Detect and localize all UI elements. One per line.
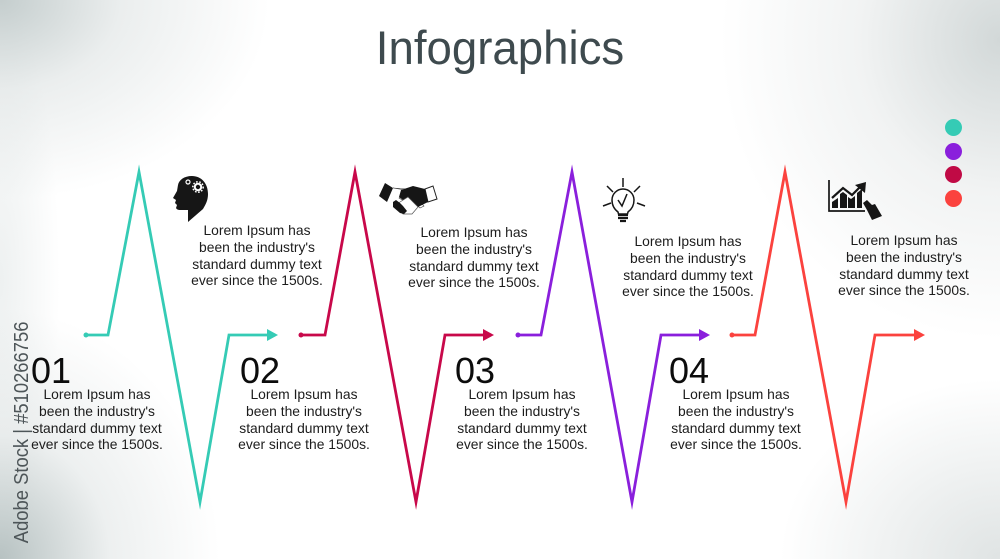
step 03: lower text [456, 386, 588, 452]
stock id label: Adobe Stock | #510266756 [11, 322, 33, 543]
step 03: lower text: been the industry's [464, 403, 580, 419]
upper text 4 [838, 232, 970, 298]
step 02: number: 02 [240, 350, 280, 391]
step 04: lower text: standard dummy text [671, 420, 801, 436]
step 03: lower text: ever since the 1500s. [456, 436, 588, 452]
upper text 4: standard dummy text [839, 266, 969, 282]
upper text 2 [408, 224, 540, 290]
upper text 4: Lorem Ipsum has [850, 232, 958, 248]
upper text 3: standard dummy text [623, 267, 753, 283]
step 02: lower text: been the industry's [246, 403, 362, 419]
legend dots [945, 119, 962, 207]
upper text 1: ever since the 1500s. [191, 272, 323, 288]
step 02: lower text: Lorem Ipsum has [250, 386, 358, 402]
upper text 1 [191, 222, 323, 288]
pulse line 4: coral [730, 172, 925, 502]
pulse line 2: crimson [298, 172, 494, 502]
upper text 3: been the industry's [630, 250, 746, 266]
upper text 1: been the industry's [199, 239, 315, 255]
step 01: lower text: standard dummy text [32, 420, 162, 436]
step 02: lower text: standard dummy text [239, 420, 369, 436]
upper text 4: ever since the 1500s. [838, 282, 970, 298]
step 02: lower text: ever since the 1500s. [238, 436, 370, 452]
upper text 1: standard dummy text [192, 256, 322, 272]
step 04: lower text: been the industry's [678, 403, 794, 419]
step 03: number: 03 [455, 350, 495, 391]
upper text 3 [622, 233, 754, 299]
step 03: lower text: Lorem Ipsum has [468, 386, 576, 402]
icon: handshake [379, 183, 437, 214]
upper text 3: ever since the 1500s. [622, 283, 754, 299]
upper text 3: Lorem Ipsum has [634, 233, 742, 249]
upper text 2: been the industry's [416, 241, 532, 257]
upper text 2: standard dummy text [409, 258, 539, 274]
upper text 4: been the industry's [846, 249, 962, 265]
step 04: lower text [670, 386, 802, 452]
icon: light bulb with check [603, 178, 645, 221]
step 04: lower text: ever since the 1500s. [670, 436, 802, 452]
upper text 2: Lorem Ipsum has [420, 224, 528, 240]
step 03: lower text: standard dummy text [457, 420, 587, 436]
step 01: number: 01 [31, 350, 71, 391]
step 02: lower text [238, 386, 370, 452]
title: Infographics [376, 21, 624, 74]
pulse line 1: teal [84, 172, 278, 502]
step 04: lower text: Lorem Ipsum has [682, 386, 790, 402]
step 01: lower text: been the industry's [39, 403, 155, 419]
pulse line 3: purple [516, 172, 710, 502]
upper text 1: Lorem Ipsum has [203, 222, 311, 238]
step 01: lower text [31, 386, 163, 452]
step 04: number: 04 [669, 350, 709, 391]
icon: chart with hand [829, 180, 882, 220]
step 01: lower text: ever since the 1500s. [31, 436, 163, 452]
upper text 2: ever since the 1500s. [408, 274, 540, 290]
icon: head with gears [173, 176, 208, 222]
step 01: lower text: Lorem Ipsum has [43, 386, 151, 402]
